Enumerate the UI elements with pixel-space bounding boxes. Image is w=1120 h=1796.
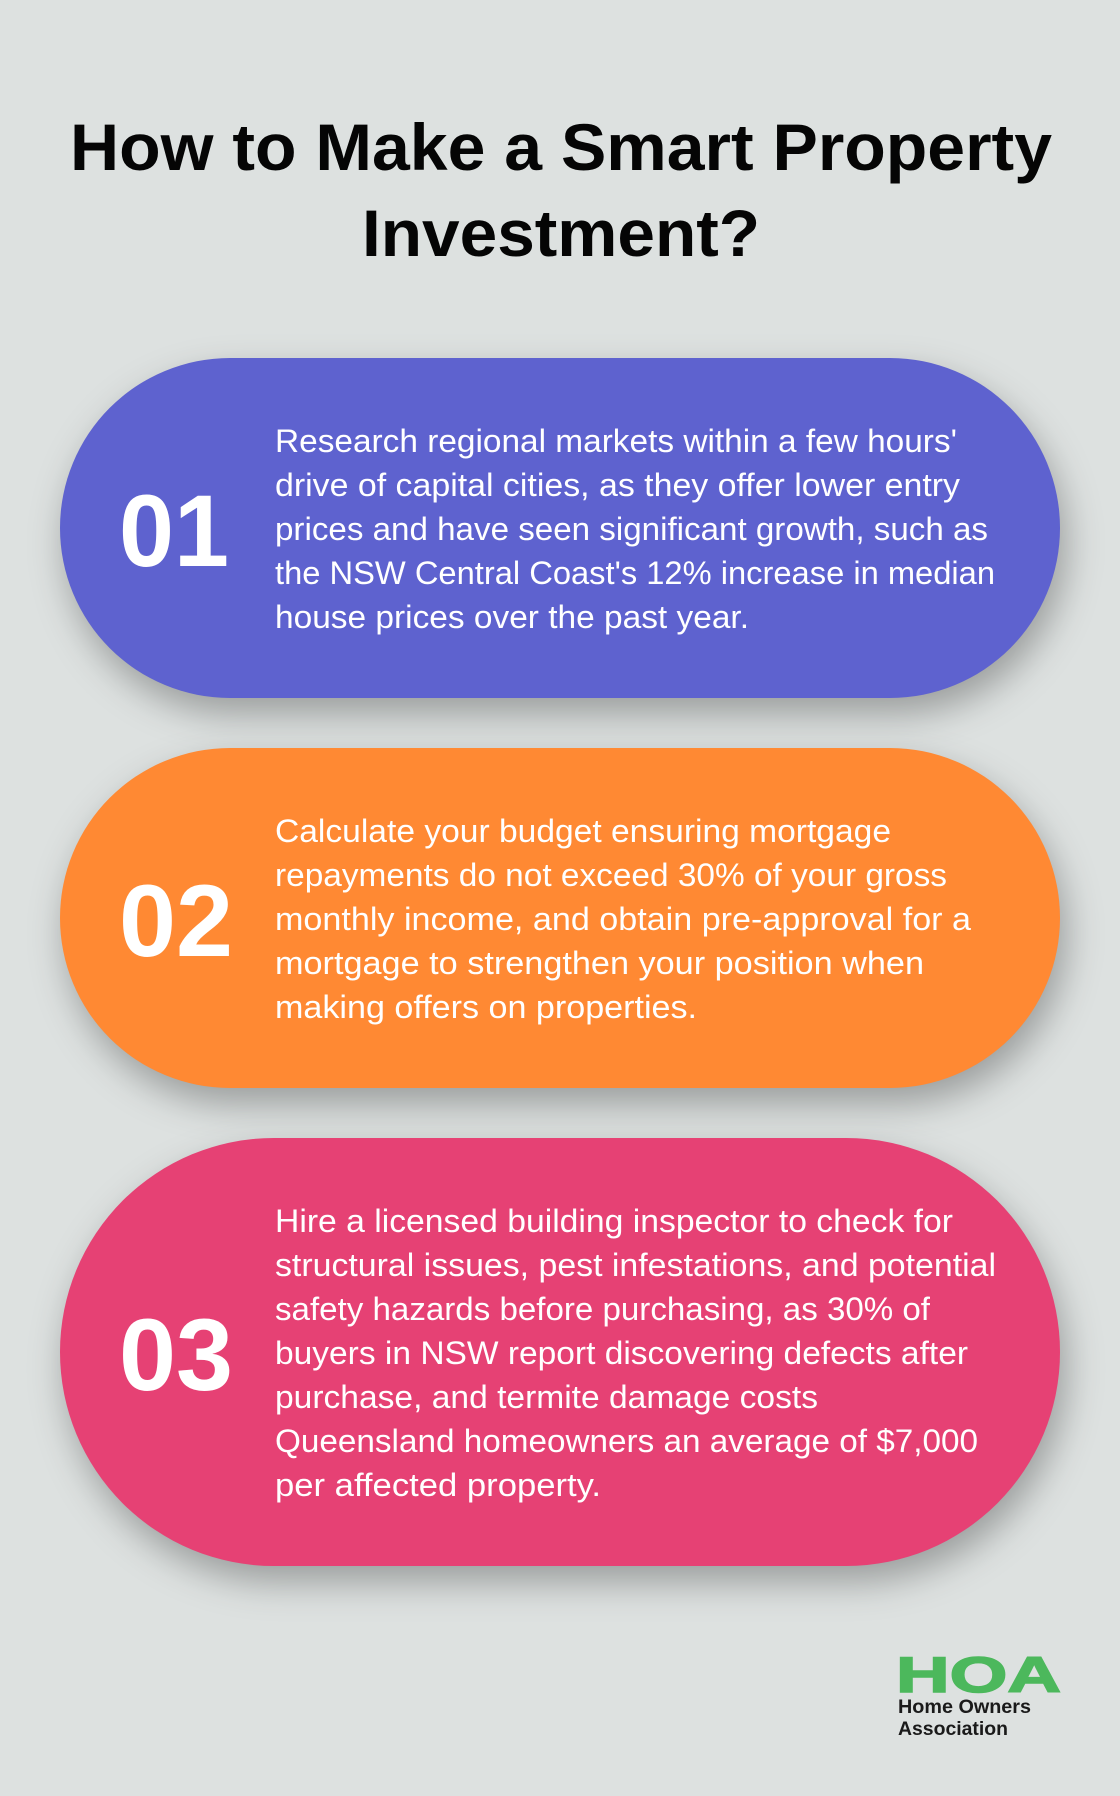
- step 02 text: monthly income, and obtain pre-approval for a: [275, 901, 971, 937]
- panel: step 03: [60, 1138, 1066, 1582]
- title: Investment?: [362, 196, 760, 270]
- step 02 text: making offers on properties.: [275, 989, 697, 1025]
- logo: HOA Home Owners Association: [896, 1647, 1061, 1740]
- step 03 text: Hire a licensed building inspector to check for: [275, 1203, 953, 1239]
- step 03 text: [275, 1203, 996, 1503]
- step 02 text: mortgage to strengthen your position when: [275, 945, 924, 981]
- step 03 text: buyers in NSW report discovering defects after: [275, 1335, 968, 1371]
- step number 01: 01: [119, 474, 229, 588]
- step 03 text: Queensland homeowners an average of $7,000: [275, 1423, 978, 1459]
- step 01 text: Research regional markets within a few hours': [275, 423, 957, 459]
- step 01 text: prices and have seen significant growth, such as: [275, 511, 988, 547]
- logo: HOA Home Owners Association: HOA: [896, 1647, 1061, 1703]
- step number 02: 02: [119, 864, 233, 978]
- step 03 text: safety hazards before purchasing, as 30% of: [275, 1291, 930, 1327]
- step 02 text: repayments do not exceed 30% of your gross: [275, 857, 947, 893]
- step 03 text: purchase, and termite damage costs: [275, 1379, 818, 1415]
- step number 03: 03: [119, 1298, 233, 1412]
- title: [70, 110, 1052, 270]
- panel: step 02: [60, 748, 1066, 1104]
- step 01 text: [275, 423, 995, 635]
- panel: step 01: [60, 358, 1066, 714]
- logo: HOA Home Owners Association: Association: [898, 1719, 1008, 1740]
- step 03 text: structural issues, pest infestations, and potential: [275, 1247, 996, 1283]
- step 02 text: [275, 813, 971, 1025]
- logo: HOA Home Owners Association: Home Owners: [898, 1697, 1031, 1718]
- title: How to Make a Smart Property: [70, 110, 1052, 184]
- step 02 text: Calculate your budget ensuring mortgage: [275, 813, 891, 849]
- step 01 text: drive of capital cities, as they offer lower entry: [275, 467, 960, 503]
- step 01 text: house prices over the past year.: [275, 599, 749, 635]
- step 01 text: the NSW Central Coast's 12% increase in median: [275, 555, 995, 591]
- step 03 text: per affected property.: [275, 1467, 601, 1503]
